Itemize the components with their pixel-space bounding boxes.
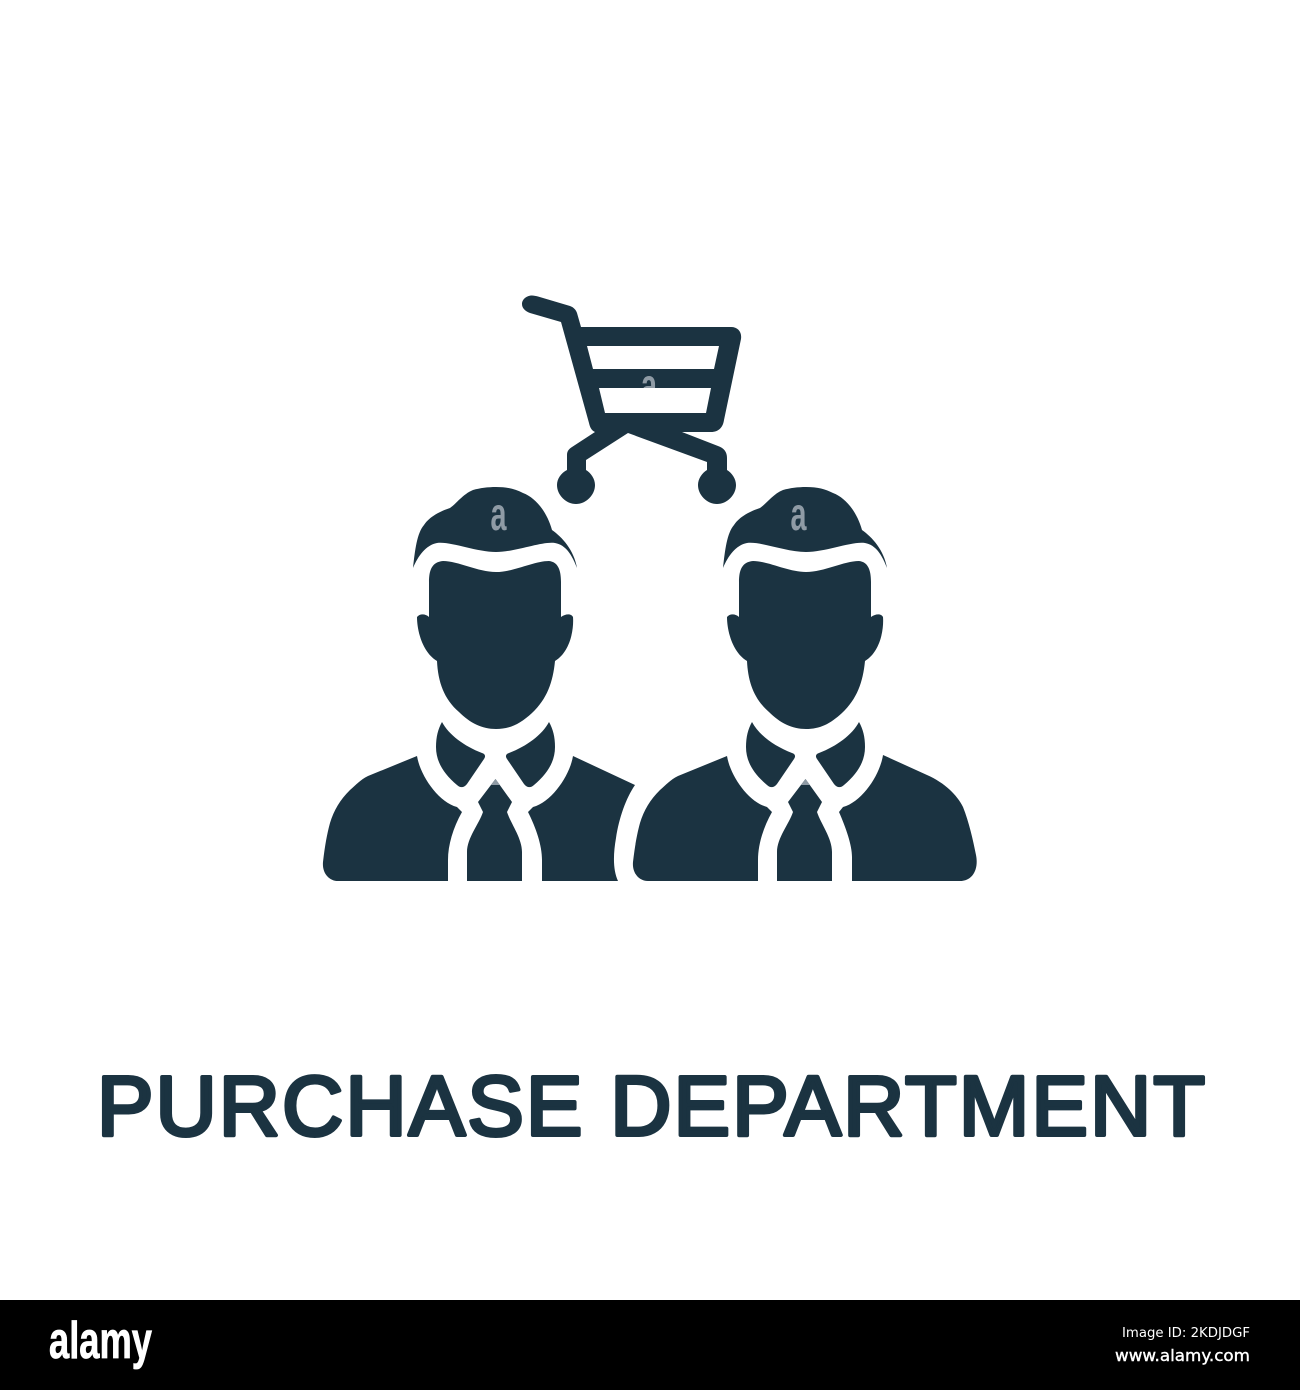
watermark letters: a [790, 488, 807, 540]
footer logo: alamy [49, 1312, 152, 1370]
icon: right businessman [633, 487, 977, 881]
title: PURCHASE DEPARTMENT [97, 1059, 1205, 1153]
left person right shoulder [528, 756, 635, 881]
icon: left businessman [323, 487, 635, 881]
left person left shoulder [323, 756, 462, 881]
right person left shoulder [633, 756, 772, 881]
watermark letters: a [490, 488, 507, 540]
image id: Image ID: 2KDJDGF [1122, 1326, 1250, 1341]
footer bar [0, 1300, 1300, 1390]
right person right shoulder [839, 755, 977, 881]
watermark letters: a [641, 359, 657, 411]
infographic canvas [0, 296, 1300, 1390]
icon: shopping cart [522, 296, 741, 504]
website: www.alamy.com [1115, 1346, 1250, 1365]
watermark letters [490, 359, 810, 785]
